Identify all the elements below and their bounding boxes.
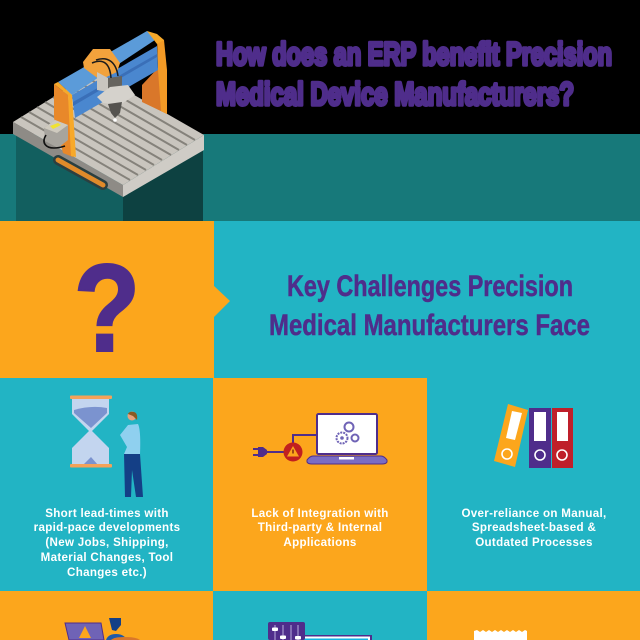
icon: receipt: [474, 630, 527, 640]
icon: binders: [494, 404, 573, 468]
text: short lead-times: Material Changes, Tool: [41, 551, 173, 564]
text: manual processes: Over-reliance on Manual,: [461, 507, 607, 520]
illustration: CNC machine: [0, 31, 204, 221]
icon: laptop with warning plug: [253, 414, 387, 464]
panel: short lead-times: [0, 378, 213, 591]
text: manual processes: Spreadsheet-based &: [472, 521, 596, 534]
text: short lead-times: Changes etc.): [67, 566, 147, 579]
text: short lead-times: rapid-pace developments: [34, 521, 180, 534]
panel: manual processes: [427, 378, 640, 591]
panel: bottom left: [0, 591, 213, 640]
header band: [0, 0, 640, 222]
text: manual processes: Outdated Processes: [475, 536, 593, 549]
panel: lack of integration: [213, 378, 427, 591]
text: lack of integration: Applications: [283, 536, 357, 549]
panel: question mark: [0, 221, 214, 378]
icon: person at laptop with warning: [65, 618, 140, 640]
text: lack of integration: Third-party & Internal: [258, 521, 382, 534]
icon: sliders and screen: [268, 622, 372, 640]
text: lack of integration: Lack of Integration with: [251, 507, 389, 520]
text: short lead-times: Short lead-times with: [45, 507, 169, 520]
icon: hourglass and person: [70, 396, 143, 497]
panel: key challenges heading: [213, 221, 640, 378]
heading: [269, 270, 590, 342]
title: [216, 36, 612, 112]
panel: bottom centre: [213, 591, 427, 640]
icon: question mark: ?: [74, 238, 140, 378]
text: short lead-times: (New Jobs, Shipping,: [45, 536, 169, 549]
panel: bottom right: [427, 591, 640, 640]
